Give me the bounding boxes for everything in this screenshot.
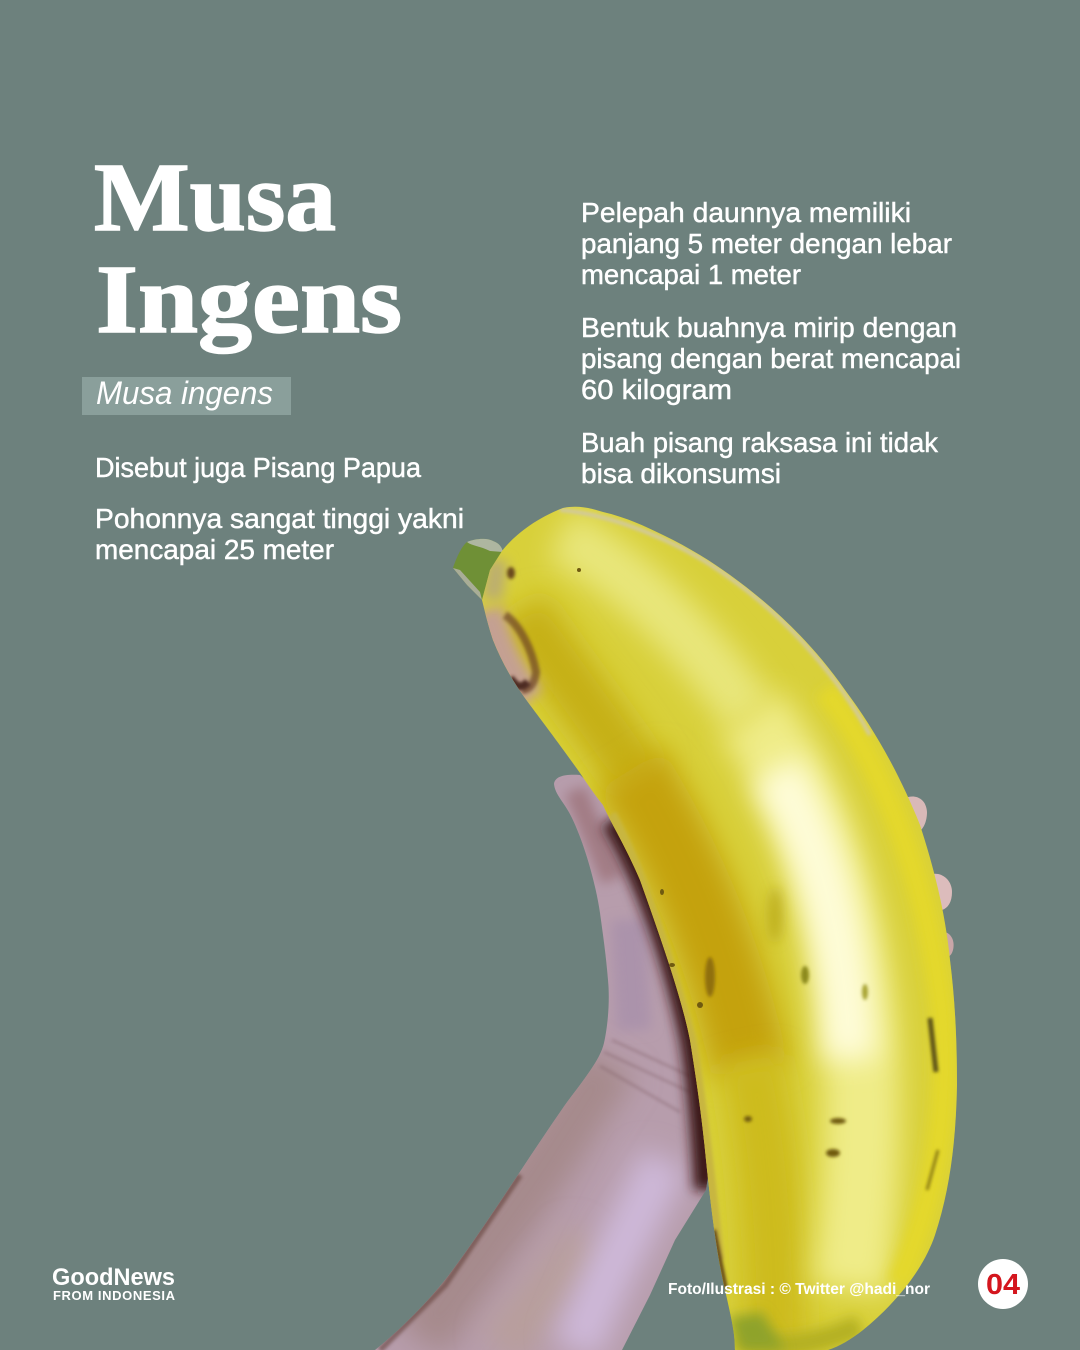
title: Musa [94, 144, 336, 252]
left facts text: Pohonnya sangat tinggi yakni [95, 503, 464, 534]
right facts text: Buah pisang raksasa ini tidak [581, 427, 939, 458]
banana spots [507, 567, 938, 1190]
photo credit: Foto/Ilustrasi : © Twitter @hadi_nor [668, 1281, 930, 1298]
banana stem bottom [728, 1312, 785, 1350]
right facts text: Bentuk buahnya mirip dengan [581, 312, 957, 343]
right facts text: panjang 5 meter dengan lebar [581, 228, 952, 259]
logo: GoodNews From Indonesia: FROM INDONESIA [53, 1288, 176, 1303]
left facts text: mencapai 25 meter [95, 534, 334, 565]
illustration: hand holding banana [375, 490, 980, 1350]
logo: GoodNews From Indonesia: GoodNews [52, 1264, 175, 1291]
right facts text [581, 197, 961, 489]
right facts text: Pelepah daunnya memiliki [581, 197, 911, 228]
right facts text: bisa dikonsumsi [581, 458, 781, 489]
right facts text: mencapai 1 meter [581, 259, 801, 290]
page number badge [978, 1259, 1028, 1309]
scientific name tag: Musa ingens [96, 375, 273, 411]
title [94, 144, 402, 354]
left facts text [95, 452, 464, 565]
right facts text: pisang dengan berat mencapai [581, 343, 961, 374]
page number badge: 04 [986, 1269, 1020, 1301]
fingertips behind banana [905, 797, 954, 957]
banana stem top [453, 539, 503, 600]
banana body [482, 506, 957, 1350]
left facts text: Disebut juga Pisang Papua [95, 452, 421, 483]
right facts text: 60 kilogram [581, 374, 732, 405]
arm and hand [375, 775, 720, 1350]
logo: GoodNews From Indonesia [52, 1264, 176, 1303]
banana [440, 490, 980, 1350]
infographic page [53, 165, 1028, 1350]
title: Ingens [96, 246, 402, 354]
